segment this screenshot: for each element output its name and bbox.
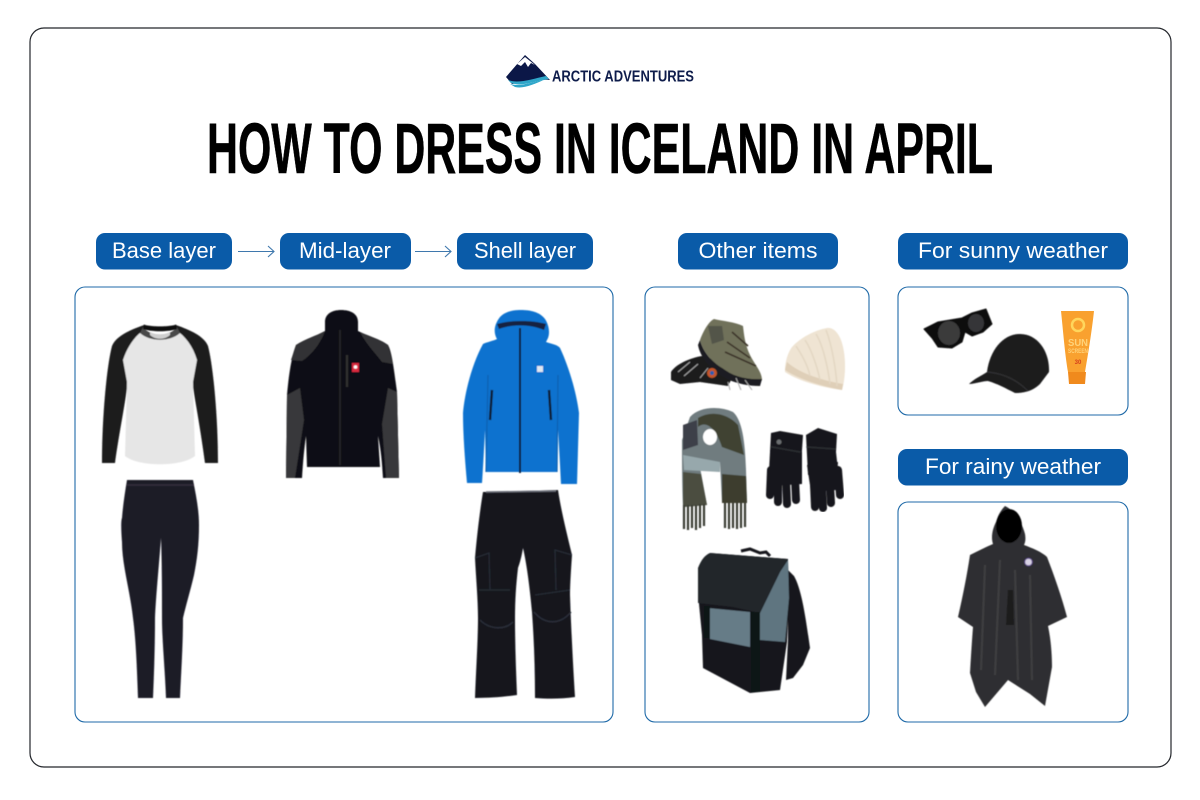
icon: sunscreen tube: 30 <box>1075 360 1082 366</box>
icon: sunglasses <box>924 309 992 348</box>
panel: other items <box>645 287 869 722</box>
label: Base layer <box>96 233 232 270</box>
label: Mid-layer <box>280 233 411 270</box>
icon: shell layer cargo trousers <box>475 490 575 699</box>
label: For rainy weather: For rainy weather <box>925 454 1101 479</box>
icon: plaid scarf <box>682 408 747 530</box>
arrow: mid to shell <box>415 246 451 257</box>
panel: layers <box>75 287 613 722</box>
logo: Arctic Adventures <box>506 55 694 87</box>
label: Base layer: Base layer <box>112 238 216 263</box>
icon: gloves <box>768 428 840 508</box>
icon: mountain <box>506 55 550 87</box>
icon: mid-layer fleece jacket <box>286 310 399 478</box>
label: For rainy weather <box>898 449 1128 486</box>
panel: sunny weather <box>898 287 1128 415</box>
icon: baseball cap <box>969 334 1049 393</box>
icon: base layer leggings <box>121 480 199 698</box>
label: Other items <box>678 233 838 270</box>
icon: backpack <box>698 549 810 693</box>
icon: sunscreen tube <box>1061 311 1094 384</box>
icon: sunscreen tube: SCREEN <box>1068 349 1088 355</box>
icon: boots with crampons <box>671 319 762 390</box>
label: Other items: Other items <box>698 238 818 263</box>
label: Shell layer: Shell layer <box>474 238 576 263</box>
icon: shell layer blue jacket <box>463 310 579 484</box>
label: Mid-layer: Mid-layer <box>299 238 391 263</box>
icon: rain poncho <box>958 506 1067 707</box>
icon: beanie <box>785 328 845 390</box>
arrow: base to mid <box>238 246 274 257</box>
label: For sunny weather <box>898 233 1128 270</box>
label: Shell layer <box>457 233 593 270</box>
logo wordmark: ARCTIC ADVENTURES <box>552 68 694 86</box>
icon: base layer long-sleeve top <box>102 324 218 464</box>
icon: sunscreen tube: SUN <box>1068 338 1088 349</box>
panel: rainy weather <box>898 502 1128 722</box>
label: For sunny weather: For sunny weather <box>918 238 1108 263</box>
